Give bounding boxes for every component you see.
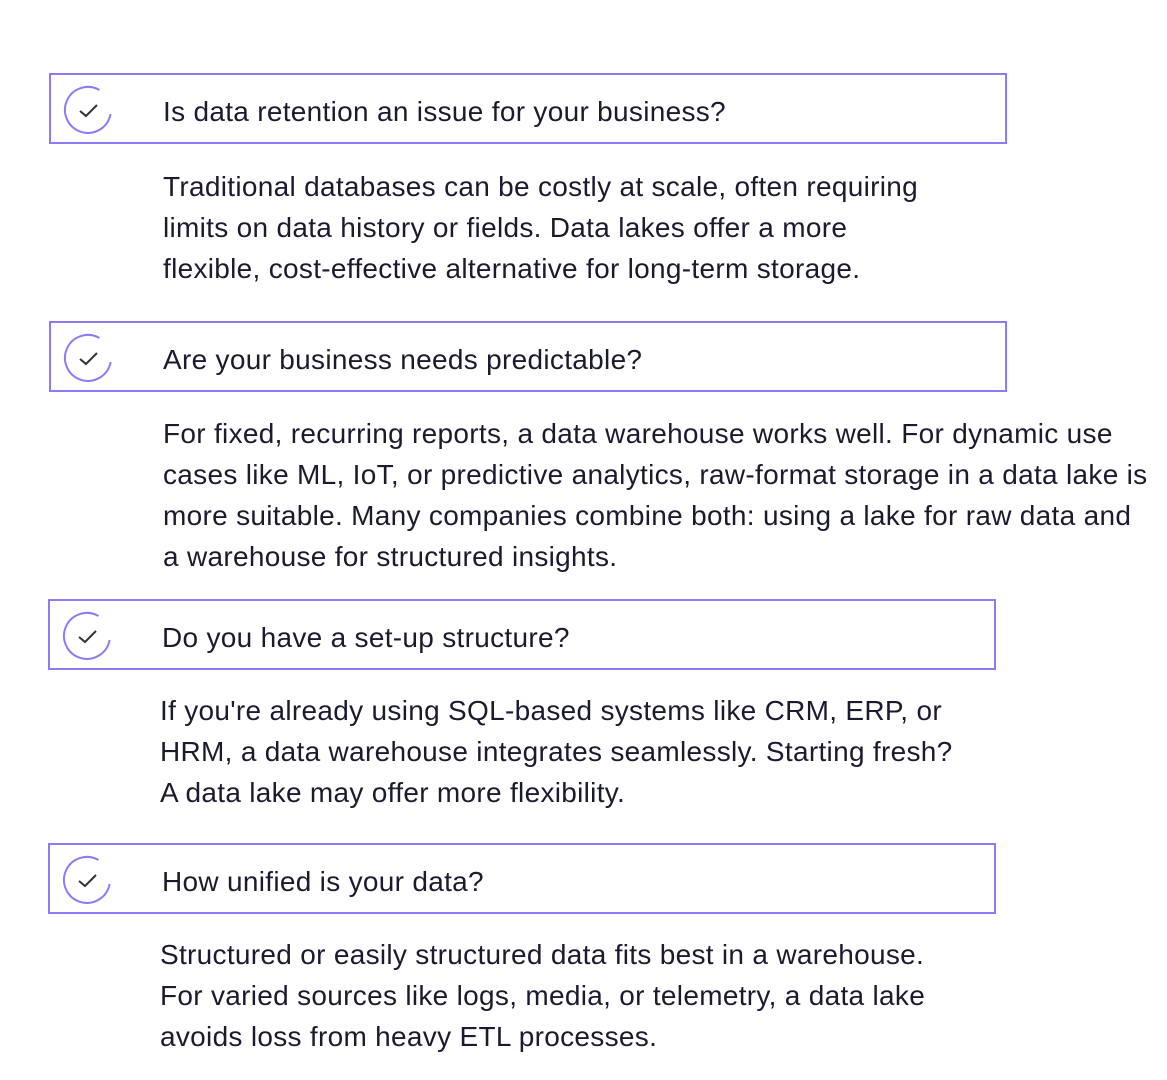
item 2 answer — [163, 418, 1147, 572]
item 1 answer: Traditional databases can be costly at scale, often requiring — [163, 171, 918, 202]
item 3 answer: A data lake may offer more flexibility. — [160, 777, 625, 808]
item 4 answer: avoids loss from heavy ETL processes. — [160, 1021, 657, 1052]
item 1 answer: flexible, cost-effective alternative for long-term storage. — [163, 253, 860, 284]
question: Are your business needs predictable? — [163, 344, 642, 375]
item 1 answer — [163, 171, 918, 284]
icon: check circle — [64, 334, 112, 382]
item 2 answer: a warehouse for structured insights. — [163, 541, 617, 572]
item 1 answer: limits on data history or fields. Data lakes offer a more — [163, 212, 847, 243]
item 2 answer: cases like ML, IoT, or predictive analytics, raw-format storage in a data lake is — [163, 459, 1147, 490]
question: How unified is your data? — [162, 866, 484, 897]
item 4 answer: For varied sources like logs, media, or telemetry, a data lake — [160, 980, 925, 1011]
question: Do you have a set-up structure? — [162, 622, 570, 653]
item 3 question box — [48, 599, 996, 670]
item 2 question box — [49, 321, 1007, 392]
icon: check circle — [62, 612, 110, 660]
item 2 answer: For fixed, recurring reports, a data warehouse works well. For dynamic use — [163, 418, 1113, 449]
icon: check circle — [64, 86, 112, 134]
icon: check circle — [62, 856, 110, 904]
item 3 answer: HRM, a data warehouse integrates seamlessly. Starting fresh? — [160, 736, 953, 767]
item 4 answer: Structured or easily structured data fits best in a warehouse. — [160, 939, 924, 970]
item 4 question box — [48, 843, 996, 914]
item 1 question box — [49, 73, 1007, 144]
item 3 answer: If you're already using SQL-based systems like CRM, ERP, or — [160, 695, 942, 726]
item 3 answer — [160, 695, 953, 808]
item 2 answer: more suitable. Many companies combine both: using a lake for raw data and — [163, 500, 1131, 531]
item 4 answer — [160, 939, 925, 1052]
question: Is data retention an issue for your business? — [163, 96, 726, 127]
